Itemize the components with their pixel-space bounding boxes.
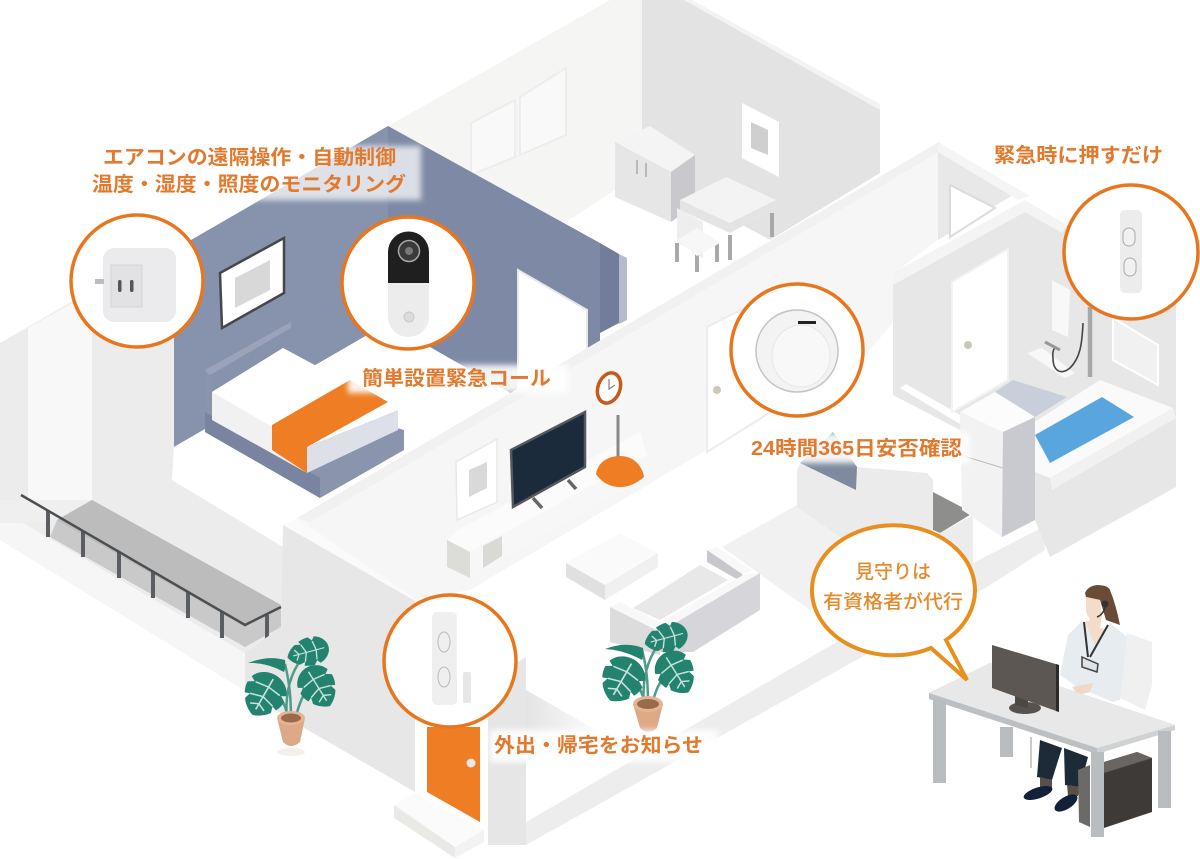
- chair: [1031, 633, 1152, 768]
- operator at desk: [929, 585, 1175, 837]
- entrance wall: [488, 657, 610, 845]
- plant left: [234, 633, 346, 756]
- shoes: [1022, 783, 1080, 815]
- monitor: [992, 645, 1059, 714]
- leaves: [592, 618, 704, 711]
- kitchen block: [797, 432, 973, 590]
- label: air conditioner control: 温度・湿度・照度のモニタリング: [92, 172, 406, 196]
- living room door: [707, 285, 790, 452]
- leaves: [234, 633, 346, 725]
- left outer wall: [0, 243, 283, 691]
- bathroom door: [952, 249, 1008, 412]
- hair: [1085, 585, 1120, 625]
- label: easy emergency call: [348, 365, 568, 393]
- socks: [1040, 777, 1080, 796]
- counter ledge: [1027, 348, 1075, 378]
- headset: [1097, 600, 1108, 617]
- window: [471, 68, 566, 175]
- entrance door: [427, 727, 480, 822]
- shirt: [1060, 620, 1127, 702]
- front floor band: [526, 527, 1045, 845]
- wall picture: [742, 103, 779, 177]
- device circle: emergency button: [1064, 185, 1198, 319]
- door knob: [466, 758, 476, 768]
- device circle: door sensor: [384, 595, 516, 727]
- desk back leg: [1000, 727, 1013, 757]
- entrance step: [394, 793, 484, 858]
- balcony: [21, 495, 281, 647]
- pc tower: [1078, 752, 1152, 828]
- shower: [1045, 307, 1090, 377]
- living room picture: [456, 439, 497, 520]
- coffee table: [566, 533, 658, 600]
- pot: [277, 711, 305, 746]
- front left wall: [245, 518, 430, 792]
- desk legs: [933, 699, 1171, 837]
- plant right: [592, 618, 704, 732]
- speech bubble: [812, 525, 975, 680]
- dining table and chair: [677, 177, 776, 272]
- label: going out notification: 外出・帰宅をお知らせ: [494, 734, 703, 757]
- label: press in emergency: 緊急時に押すだけ: [994, 144, 1163, 167]
- hand: [1072, 683, 1093, 695]
- refrigerator: [960, 392, 1035, 537]
- label: air conditioner control: エアコンの遠隔操作・自動制御: [103, 146, 396, 169]
- bathroom window: [1113, 318, 1158, 385]
- device circle: round sensor: [731, 284, 863, 416]
- bed: [205, 322, 404, 498]
- label: safety check: [745, 433, 970, 463]
- label: easy emergency call: 簡単設置緊急コール: [362, 367, 551, 390]
- lamp: [596, 415, 644, 487]
- bathtub: [1033, 380, 1176, 490]
- device circle: smart plug: [71, 215, 203, 347]
- pot: [633, 696, 663, 732]
- pants: [1037, 740, 1088, 787]
- sofa: [610, 547, 760, 655]
- upper room: [388, 0, 880, 300]
- bedroom picture frame: [220, 238, 284, 328]
- bathroom wall: [893, 200, 1176, 557]
- living room wall: [297, 142, 1000, 600]
- hall floor shade: [722, 505, 885, 610]
- water heater: [1052, 280, 1070, 337]
- balcony railing: [21, 495, 281, 641]
- bedroom door: [518, 270, 587, 400]
- label: air conditioner control: [76, 146, 421, 200]
- speech bubble: 有資格者が代行: [823, 591, 963, 613]
- lanyard and badge: [1082, 622, 1108, 672]
- cabinet: [615, 126, 695, 222]
- face and neck: [1085, 597, 1107, 645]
- television: [511, 412, 585, 508]
- orange bed runner: [272, 380, 388, 473]
- bedroom blue wall: [172, 126, 627, 547]
- floor ledge: [900, 384, 962, 424]
- bathroom back room: [938, 142, 1030, 240]
- keyboard: [1060, 688, 1082, 703]
- bath mat: [995, 380, 1067, 417]
- desk top: [929, 663, 1175, 754]
- tv board: [447, 432, 647, 578]
- wall clock: [593, 370, 625, 406]
- device circle: video doorbell: [342, 217, 474, 349]
- speech bubble: 見守りは: [855, 561, 931, 583]
- label: safety check: 24時間365日安否確認: [751, 437, 962, 460]
- bedroom floor: [172, 323, 540, 547]
- label: going out notification: [490, 730, 718, 762]
